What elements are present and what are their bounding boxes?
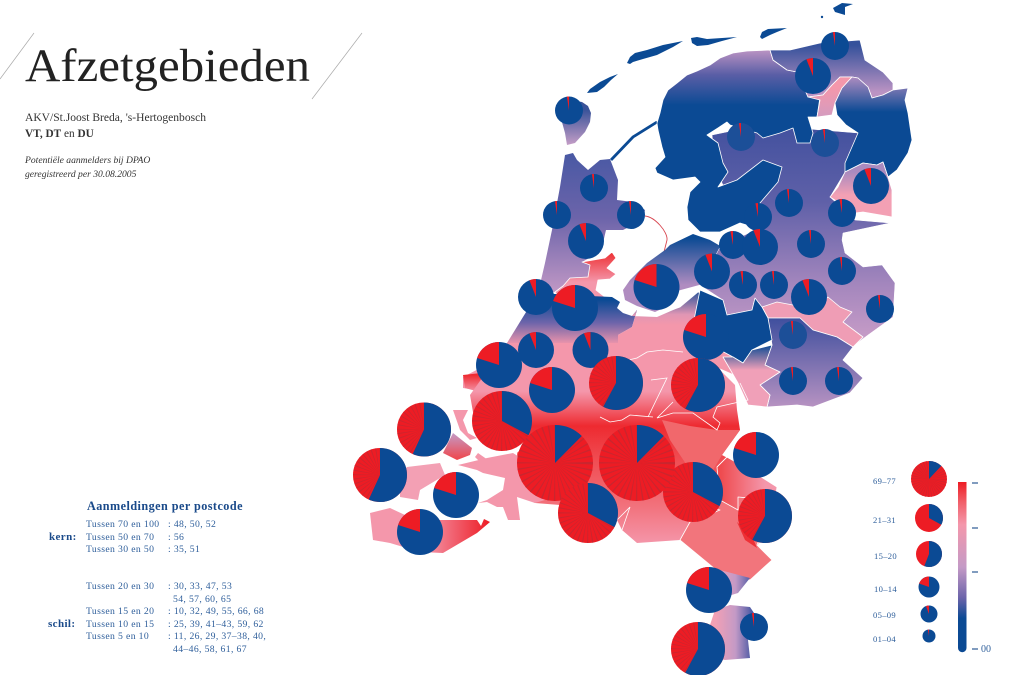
pie bbox=[738, 489, 792, 543]
legend size labels: 69–77 bbox=[873, 476, 896, 486]
pie bbox=[353, 448, 407, 502]
pie bbox=[742, 229, 778, 265]
legend pie 10-14 bbox=[918, 576, 940, 598]
pie bbox=[683, 314, 729, 360]
colour scale bar bbox=[958, 482, 966, 652]
legend pie 21-31 bbox=[915, 504, 943, 532]
province: Gelderland centre bbox=[618, 292, 735, 375]
pie bbox=[828, 257, 856, 285]
pie bbox=[558, 483, 618, 543]
legend size labels: 15–20 bbox=[874, 551, 897, 561]
fringe rows: : 25, 39, 41–43, 59, 62 bbox=[168, 619, 264, 630]
title: Afzetgebieden bbox=[25, 40, 310, 92]
postcode legend heading: Aanmeldingen per postcode bbox=[87, 499, 243, 513]
pie bbox=[397, 509, 443, 555]
province: Zuid-Beveland bbox=[458, 453, 545, 520]
legend size labels: 05–09 bbox=[873, 610, 896, 620]
fringe rows: 54, 57, 60, 65 bbox=[173, 594, 231, 605]
pie bbox=[543, 201, 571, 229]
core rows: Tussen 50 en 70 bbox=[86, 532, 154, 543]
province: Tholen bbox=[443, 433, 472, 460]
province: Brabant and central south bbox=[470, 343, 777, 580]
pie bbox=[529, 367, 575, 413]
pie bbox=[853, 168, 889, 204]
province: Twente north pink strip bbox=[830, 162, 892, 217]
pie bbox=[599, 425, 675, 501]
Zuid-Holland islands red edge bbox=[463, 372, 497, 393]
province: Overijssel and Drenthe bbox=[700, 125, 895, 347]
core rows: : 48, 50, 52 bbox=[168, 519, 216, 530]
province: Amsterdam area bbox=[555, 252, 616, 320]
pie bbox=[733, 432, 779, 478]
fringe rows: 44–46, 58, 61, 67 bbox=[173, 644, 247, 655]
fringe rows: Tussen 20 en 30 bbox=[86, 581, 154, 592]
pie bbox=[686, 567, 732, 613]
province: Friesland and Flevoland bbox=[655, 50, 820, 232]
pie bbox=[476, 342, 522, 388]
pie bbox=[568, 223, 604, 259]
province: Zuid-Holland bbox=[463, 293, 637, 400]
pie bbox=[580, 174, 608, 202]
pie bbox=[518, 332, 554, 368]
core rows: Tussen 70 en 100 bbox=[86, 519, 160, 530]
pie bbox=[671, 358, 725, 412]
legend size labels: 01–04 bbox=[873, 634, 896, 644]
note: registered applicants: geregistreerd per 30.08.2005 bbox=[25, 169, 137, 180]
pie bbox=[866, 295, 894, 323]
pie bbox=[518, 279, 554, 315]
pie bbox=[433, 472, 479, 518]
legend pie 01-04 bbox=[922, 630, 936, 642]
core rows: Tussen 30 en 50 bbox=[86, 544, 154, 555]
core group label: kern: bbox=[49, 531, 77, 543]
province: Groningen north bbox=[770, 40, 893, 98]
colour scale ticks bbox=[972, 483, 978, 649]
pie bbox=[589, 356, 643, 410]
pie bbox=[634, 264, 680, 310]
province: central pink band bbox=[762, 297, 863, 347]
pie bbox=[472, 391, 532, 451]
islands bbox=[587, 3, 853, 93]
legend size labels: 21–31 bbox=[873, 515, 896, 525]
colour scale zero label: 00 bbox=[981, 644, 991, 655]
pie bbox=[572, 332, 608, 368]
fringe rows: Tussen 15 en 20 bbox=[86, 606, 154, 617]
pie bbox=[555, 96, 583, 124]
pie bbox=[517, 425, 593, 501]
pie bbox=[740, 613, 768, 641]
pie bbox=[671, 622, 725, 675]
Limburg red edge bbox=[737, 522, 757, 548]
core rows: : 35, 51 bbox=[168, 544, 200, 555]
pie bbox=[779, 367, 807, 395]
province: Groningen east bbox=[835, 77, 912, 177]
pie bbox=[828, 199, 856, 227]
fringe rows: : 11, 26, 29, 37–38, 40, bbox=[168, 631, 266, 642]
title rule: left diagonal bbox=[0, 33, 34, 79]
pie bbox=[694, 254, 730, 290]
fringe rows: Tussen 5 en 10 bbox=[86, 631, 149, 642]
legend size labels: 10–14 bbox=[874, 584, 897, 594]
legend pie 69-77 bbox=[911, 461, 947, 497]
province: Arnhem area bbox=[690, 290, 772, 363]
pie bbox=[811, 129, 839, 157]
pie bbox=[797, 230, 825, 258]
province: east Brabant salmon bbox=[662, 420, 740, 470]
legend pie 05-09 bbox=[920, 606, 938, 622]
title rule: right diagonal bbox=[312, 33, 362, 99]
pie bbox=[791, 279, 827, 315]
core rows: : 56 bbox=[168, 532, 184, 543]
fringe rows: Tussen 10 en 15 bbox=[86, 619, 154, 630]
province: Flevoland south bbox=[623, 234, 722, 312]
subtitle: school: AKV/St.Joost Breda, 's-Hertogenbosch bbox=[25, 112, 206, 124]
province: Walcheren bbox=[400, 463, 445, 500]
Afsluitdijk bbox=[611, 122, 657, 160]
fringe group label: schil: bbox=[48, 618, 75, 630]
province: Arnhem lower gradient bbox=[723, 345, 780, 407]
pie bbox=[719, 231, 747, 259]
fringe rows: : 30, 33, 47, 53 bbox=[168, 581, 232, 592]
white regional boundaries bbox=[510, 292, 750, 530]
pie bbox=[760, 271, 788, 299]
map of the Netherlands bbox=[370, 3, 912, 660]
size and colour legend bbox=[873, 461, 991, 655]
note: registered applicants: Potentiële aanmelders bij DPAO bbox=[24, 155, 150, 166]
province: Zeeuws-Vlaanderen bbox=[370, 508, 490, 553]
fringe rows: : 10, 32, 49, 55, 66, 68 bbox=[168, 606, 264, 617]
province: Groningen centre bbox=[808, 77, 852, 117]
subtitle: departments: VT, DT en DU bbox=[25, 128, 94, 140]
pie markers on the map bbox=[353, 32, 894, 675]
province: Limburg upper bbox=[717, 457, 777, 510]
province: Schouwen bbox=[453, 410, 477, 440]
pie bbox=[663, 462, 723, 522]
pie bbox=[397, 402, 451, 456]
pie bbox=[821, 32, 849, 60]
Limburg south bbox=[700, 605, 762, 660]
Limburg middle strip bbox=[712, 570, 750, 600]
pie bbox=[825, 367, 853, 395]
postcode legend bbox=[48, 499, 266, 655]
island: Texel bbox=[560, 100, 591, 145]
pie bbox=[744, 203, 772, 231]
dike line bbox=[645, 216, 667, 252]
province: Limburg lower bbox=[680, 497, 775, 580]
pie bbox=[795, 58, 831, 94]
pie bbox=[727, 123, 755, 151]
pie bbox=[779, 321, 807, 349]
province: Achterhoek bbox=[760, 318, 863, 407]
province: Noord-Beveland bbox=[475, 453, 488, 462]
pie bbox=[617, 201, 645, 229]
legend pie 15-20 bbox=[916, 541, 942, 567]
pie bbox=[775, 189, 803, 217]
pie bbox=[552, 285, 598, 331]
pie bbox=[729, 271, 757, 299]
province: Noord-Holland bbox=[538, 153, 645, 293]
